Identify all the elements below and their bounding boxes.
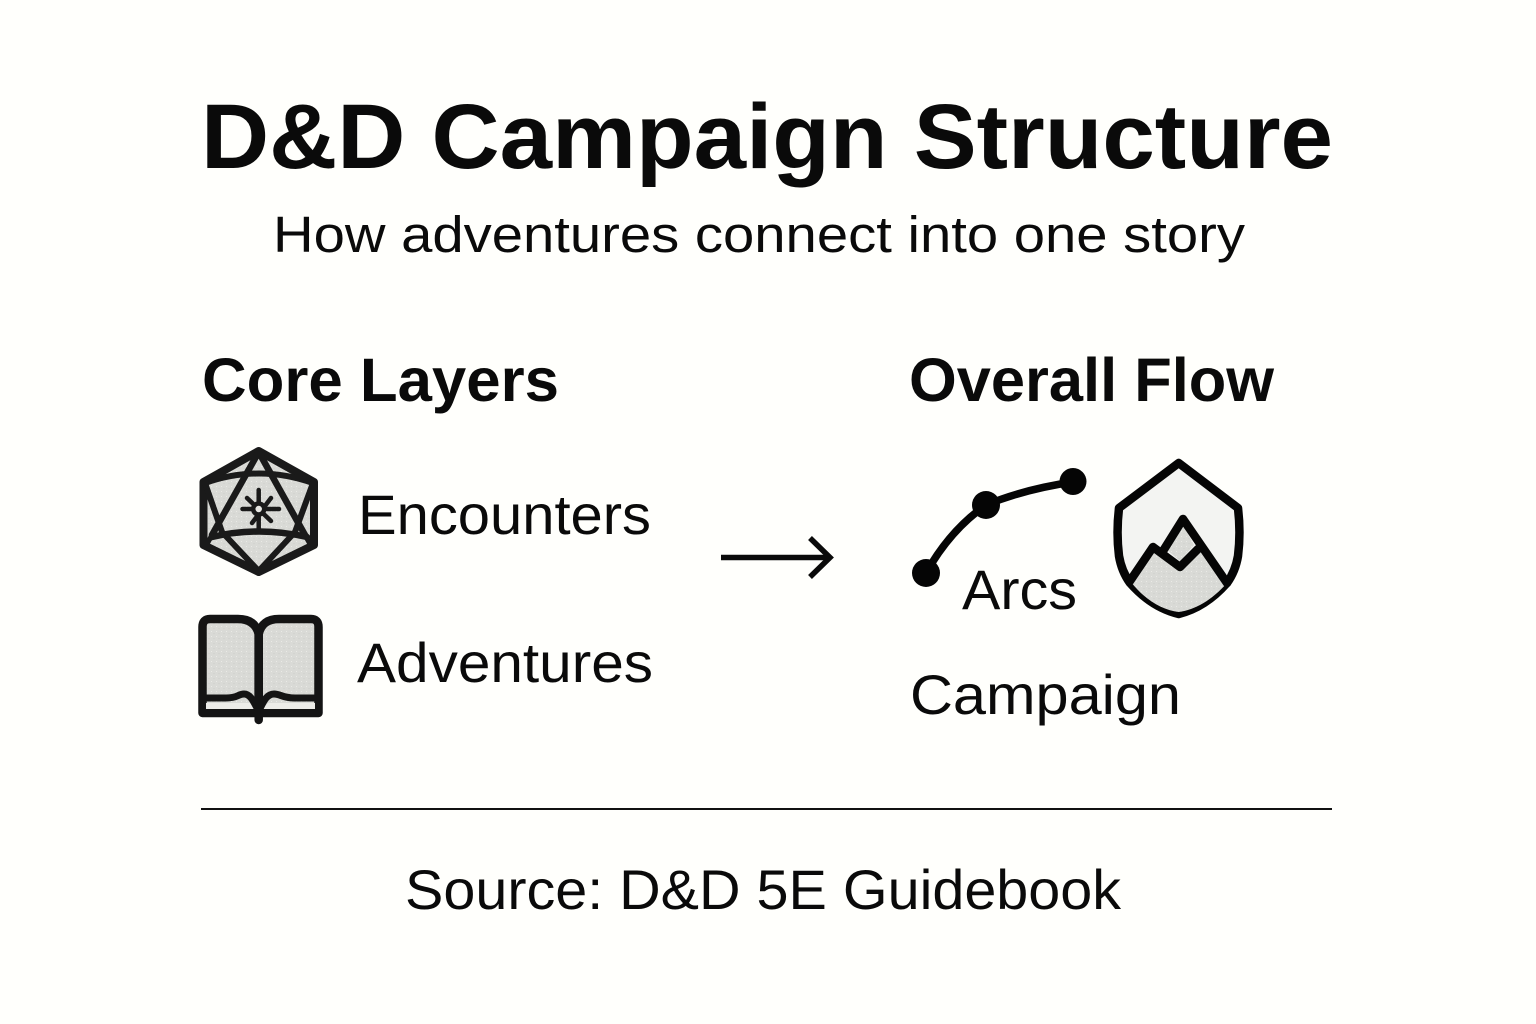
icon: d20 die (204, 451, 314, 572)
label: encounters: Encounters (358, 483, 651, 546)
heading: overall flow: Overall Flow (909, 346, 1275, 414)
arrow (721, 538, 830, 577)
subtitle: How adventures connect into one story (273, 206, 1246, 263)
icon: open book (202, 619, 318, 720)
icon: mountain shield (1118, 463, 1240, 614)
icon: story arc (912, 468, 1086, 587)
label: arcs: Arcs (962, 558, 1077, 621)
source note: Source: D&D 5E Guidebook (405, 858, 1122, 921)
label: campaign: Campaign (910, 663, 1181, 726)
divider (201, 808, 1332, 810)
heading: core layers: Core Layers (202, 346, 559, 414)
label: adventures: Adventures (357, 631, 653, 694)
title: D&D Campaign Structure (201, 86, 1333, 188)
